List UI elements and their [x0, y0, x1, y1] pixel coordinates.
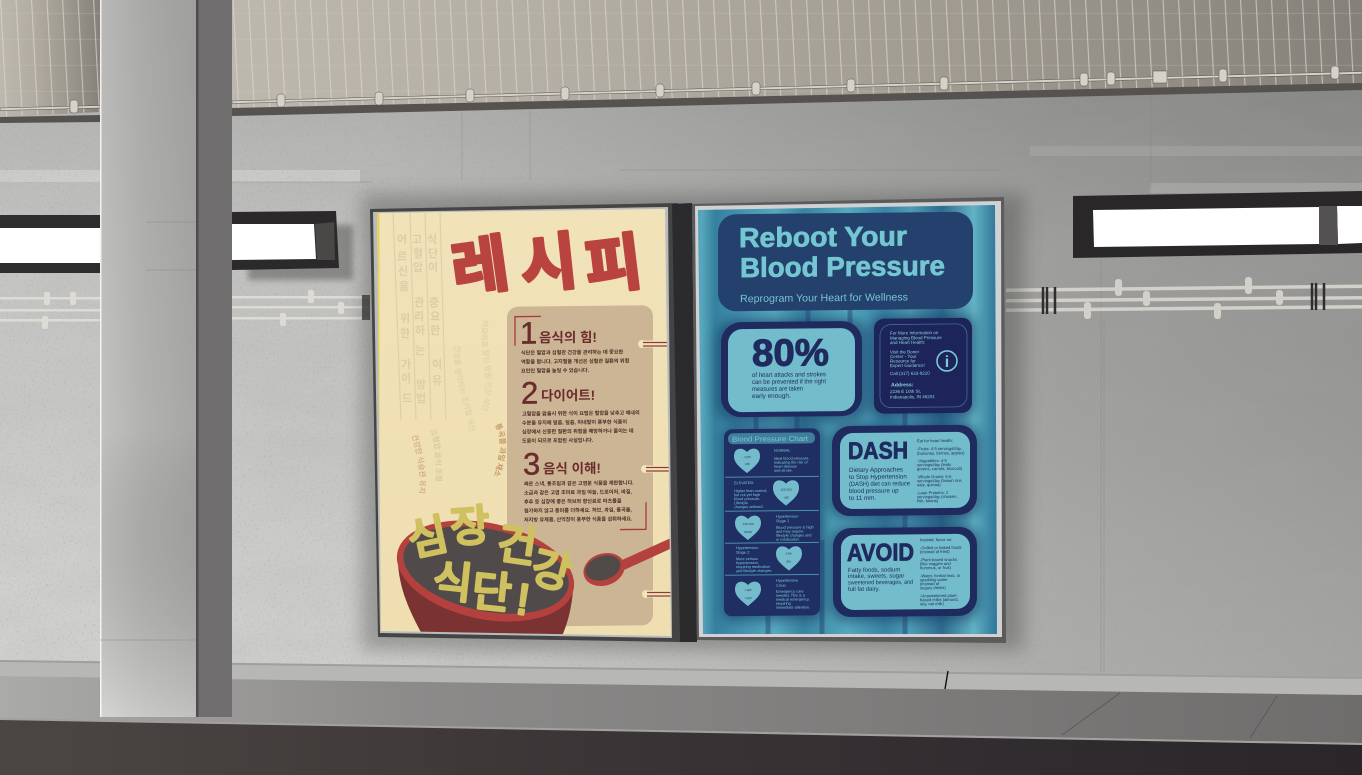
info panel: and Heart Health: [890, 340, 925, 345]
DASH panel: DASH [848, 437, 908, 465]
row: normal: <80 [744, 462, 750, 466]
steam text: 통곡물 과일 채소 [494, 423, 506, 476]
row: stage 2: More serious [736, 557, 758, 561]
steam text [412, 321, 506, 494]
AVOID panel: Fatty foods, sodium [848, 567, 900, 574]
DASH panel: -Whole Grains: 6-8 [917, 474, 952, 479]
row: stage 1: 130-139 [742, 522, 754, 526]
DASH panel: to Stop Hypertension [849, 473, 907, 481]
DASH panel: to 11 mm. [849, 495, 876, 502]
vertical title columns: 위 [400, 312, 410, 325]
DASH panel: servings/day (leafy [917, 462, 952, 467]
row: elevated: <80 [783, 496, 789, 500]
steam text: 마요이로 향신 방법 건강 식단 [481, 321, 492, 411]
AVOID panel: based milks (almond, [920, 597, 959, 602]
row: stage 1: Hypertension [776, 515, 798, 519]
subtitle: Reprogram Your Heart for Wellness [740, 291, 908, 305]
DASH panel: -Fruits: 4-5 servings/day, [917, 446, 962, 451]
vertical title columns: 방 [416, 378, 426, 391]
DASH panel: Eat for heart health: [917, 438, 953, 443]
heading: recipe: 레 [447, 230, 513, 306]
steam text: 건강한 식습관 유지 [412, 434, 426, 494]
AVOID panel: intake, sweets, sugar [848, 573, 904, 580]
vertical title columns [393, 213, 446, 420]
section 1: 역할을 합니다. 고지혈을 개선은 심혈관 질환의 위험 [521, 357, 630, 366]
row: normal: and stroke. [774, 469, 793, 473]
section 2: 심장에서 신중한 질환의 위험을 예방하거나 줄이는 데 [522, 427, 634, 436]
poster: blood pressure [690, 200, 1005, 640]
section 2: 2 [521, 375, 538, 411]
section 2 [522, 382, 640, 443]
heading: heart healthy diet: 단 [469, 567, 514, 619]
heading: recipe: 시 [517, 227, 581, 302]
section 1 [521, 322, 629, 373]
info panel: Resource for [890, 358, 916, 364]
vertical title columns: 식 [427, 233, 437, 246]
steam text: 고혈압 음식 조절 [430, 428, 442, 482]
DASH panel: -Vegetables: 4-5 [917, 458, 948, 463]
DASH panel: blood pressure up [849, 487, 899, 495]
vertical title columns: 법 [416, 392, 426, 405]
vertical title columns: 드 [402, 393, 412, 405]
corner bracket [515, 316, 541, 346]
vertical title columns: 한 [430, 323, 440, 337]
heading: Reboot Your [739, 220, 907, 253]
ceiling tiles [0, 0, 1362, 123]
icon: info: i [945, 354, 949, 371]
row: normal: heart disease [774, 465, 797, 469]
row: stage 2: Stage 2: [736, 551, 750, 555]
DASH panel: servings/day (chicken, [917, 494, 957, 499]
section 3 [524, 452, 634, 522]
info panel: 2236 E 10th St, [890, 389, 921, 394]
AVOID panel: full fat dairy. [848, 587, 880, 593]
row: stage 1: lifestyle changes and [776, 533, 811, 538]
row: crisis: Emergency care [776, 589, 804, 594]
middle window [232, 211, 353, 280]
AVOID panel: hummus, or fruit) [920, 565, 952, 570]
vertical title columns: 압 [413, 261, 423, 274]
row: normal: NORMAL: [774, 449, 791, 453]
DASH panel: Dietary Approaches [849, 466, 903, 474]
AVOID panel: sparkling water [920, 577, 948, 582]
corner bracket [620, 502, 646, 530]
poster: blood pressure frame [672, 197, 1006, 643]
row: elevated: Lifestyle [734, 501, 748, 505]
vertical title columns: 유 [432, 374, 442, 387]
left window [0, 215, 100, 273]
row: crisis: immediate attention. [776, 605, 810, 610]
row: stage 1: 80-89 [744, 530, 752, 534]
row: stage 1: Blood pressure is high [776, 525, 814, 530]
info panel: Address: [891, 382, 914, 389]
AVOID panel: soy, oat milk) [920, 601, 944, 606]
row: normal: Ideal blood pressure, [774, 456, 809, 461]
section 1: 음식의 힘! [539, 330, 597, 345]
vertical title columns: 이 [401, 372, 411, 385]
section 1: 요인인 혈압을 높일 수 있습니다. [521, 367, 590, 375]
section 3: 소금과 같은 고염 조미료 과일 야늘, 드로이저, 바질, [524, 488, 632, 497]
row: elevated: ELEVATED: [734, 481, 754, 485]
info panel: Indianapolis, IN 46201 [890, 394, 935, 400]
stat panel: 80%: of heart attacks and strokes [752, 371, 826, 379]
AVOID panel: -Plant-based snacks [920, 557, 957, 562]
vertical title columns: 한 [400, 326, 410, 340]
heading: heart healthy diet: 장 [449, 502, 491, 552]
wall pipes left [0, 290, 370, 329]
concrete pillar [100, 0, 232, 717]
row: elevated: 120-129 [780, 488, 792, 492]
info panel: Expert Guidance! [890, 363, 925, 368]
heading: recipe: 피 [581, 228, 646, 303]
vertical title columns: 이 [432, 358, 442, 371]
heading: heart healthy diet: 건 [494, 520, 540, 573]
row: stage 1 [735, 514, 814, 542]
row: crisis: needed. This is a [776, 593, 806, 598]
section 2: 수분을 유지에 덮음, 덮음, 미네랄이 풍부한 식품이 [522, 419, 627, 427]
row: crisis: >120 [745, 596, 752, 600]
vertical title columns: 혈 [413, 246, 423, 260]
wall pipes right [1006, 277, 1362, 319]
info panel: For More Information on [890, 330, 939, 336]
info panel: Managing Blood Pressure [890, 335, 942, 341]
AVOID panel: sweetened beverages, and [848, 580, 913, 587]
stat panel: 80%: measures are taken [752, 385, 803, 393]
AVOID panel: -Water, herbal teas, or [920, 573, 961, 578]
row: stage 2: 90+ [786, 560, 792, 564]
DASH panel: (DASH) diet can reduce [849, 480, 911, 488]
row: stage 1: and may require [776, 529, 803, 534]
row: crisis: Crisis: [776, 584, 787, 588]
vertical title columns: 신 [398, 265, 408, 278]
DASH panel: fish, beans) [917, 498, 939, 503]
title panel: Blood Pressure [740, 250, 945, 283]
row: crisis: requiring [776, 602, 791, 606]
section 2: 고혈압을 앓을시 위한 식이 요법은 혈압을 낮추고 체내의 [522, 409, 640, 418]
info panel [507, 305, 653, 627]
AVOID panel [833, 527, 977, 617]
section 3: 짜온 스낵, 통조림과 같은 고염분 식품을 제한합니다. [524, 479, 634, 488]
poster: recipe [377, 209, 671, 636]
section 1: 식단은 혈압과 심혈관 건강을 관리하는 데 중요한 [521, 349, 624, 357]
row: elevated: changes advised. [734, 505, 764, 509]
vertical title columns: 고 [412, 234, 422, 246]
vertical title columns: 중 [429, 296, 439, 309]
vertical title columns: 리 [414, 310, 424, 323]
info panel: Visit the Boner [890, 349, 920, 355]
section 3: 후추 등 심장에 좋은 허브와 향신료로 마츠를을 [524, 498, 622, 506]
AVOID panel: (instead of [920, 581, 940, 586]
vertical title columns: 요 [430, 310, 440, 323]
poster shadows [362, 194, 1024, 650]
row: normal: <120 [744, 455, 751, 459]
row: elevated: blood pressure. [734, 497, 760, 501]
heading: recipe [450, 230, 640, 293]
chart panel: Blood Pressure Chart [732, 434, 808, 444]
DASH panel: servings/day (brown rice, [917, 478, 963, 483]
AVOID panel: sugary drinks) [920, 585, 946, 590]
vertical title columns: 단 [428, 247, 438, 260]
heading: heart healthy diet: 강 [526, 543, 576, 599]
vertical title columns: 하 [415, 324, 425, 337]
conduit and clips along ceiling [0, 66, 1362, 113]
row: elevated [734, 480, 799, 509]
heading: heart healthy diet: 심 [404, 511, 452, 566]
section 3: 음식 이해! [543, 461, 601, 476]
row: elevated: but not yet high [734, 493, 760, 497]
concrete wall [0, 80, 1362, 690]
row: stage 2: hypertension, [736, 561, 759, 565]
right window [1073, 191, 1362, 258]
DASH panel: greens, carrots, broccoli) [917, 466, 963, 471]
stat panel: 80%: can be prevented if the right [752, 378, 826, 386]
vertical title columns: 가 [401, 357, 411, 371]
icon: spoon [583, 538, 670, 586]
DASH panel: -Lean Proteins: 2 [917, 490, 949, 495]
heading: heart healthy diet [408, 503, 574, 616]
panel shadows [716, 315, 981, 623]
DASH panel: oats, quinoa) [917, 482, 941, 487]
heading: heart healthy diet: 식 [430, 557, 475, 609]
row: stage 2: 140+ [786, 552, 793, 556]
info panel: Call (317) 633-9210 [890, 371, 930, 376]
steam text: 건강을 생각하는 조리법 식단 [454, 346, 476, 432]
vertical title columns: 는 [415, 344, 425, 357]
section 1: 1 [520, 315, 537, 351]
row: stage 2 [736, 546, 802, 573]
row: crisis: >180 [745, 588, 752, 592]
row: crisis [735, 578, 810, 610]
stat panel: 80%: 80% [752, 332, 829, 375]
ledge and platform [0, 660, 1362, 775]
vertical title columns: 을 [399, 280, 409, 293]
row: crisis: medical emergency, [776, 597, 810, 602]
section 3: 3 [523, 446, 540, 482]
row: stage 2: requiring medication [736, 565, 770, 569]
AVOID panel: Instead, focus on: [920, 537, 952, 542]
vertical title columns: 이 [428, 261, 438, 274]
poster: recipe frame [370, 203, 680, 642]
row: crisis: Hypertensive [776, 579, 798, 583]
chart heading [728, 432, 815, 444]
section 2: 다이어트! [541, 388, 595, 403]
DASH panel [832, 425, 977, 516]
row: stage 2: Hypertension [736, 546, 758, 550]
binder ticks [638, 340, 670, 598]
row: stage 1: or medication. [776, 538, 800, 542]
vertical title columns: 어 [397, 233, 407, 246]
stat panel: 80% [721, 321, 862, 417]
section 2: 도움이 되므로 포함된 사실입니다. [522, 437, 594, 445]
row: stage 2: and lifestyle changes. [736, 569, 773, 573]
icon: soup bowl [396, 520, 574, 634]
info panel [874, 318, 972, 414]
AVOID panel: (instead of fried) [920, 549, 950, 554]
AVOID panel: -Grilled or baked foods [920, 545, 961, 550]
AVOID panel: AVOID [847, 539, 914, 567]
vertical title columns: 르 [397, 250, 407, 263]
section 3: 저지방 유제품, 신억장이 풍부한 식품을 섭취하세요. [524, 515, 633, 524]
row: normal: indicating the risk of [774, 460, 809, 465]
info panel: Center - Your [890, 354, 917, 359]
title panel [718, 212, 973, 311]
row: normal [734, 448, 809, 473]
stat panel: 80%: early enough. [752, 393, 791, 400]
section 3: 첨가하지 않고 풍미를 더하세요. 허브, 과일, 통곡물, [524, 506, 632, 515]
AVOID panel: (like veggies and [920, 561, 951, 566]
row: elevated: Higher than normal, [734, 489, 767, 493]
row: stage 1: Stage 1 [776, 519, 789, 523]
DASH panel: (bananas, berries, apples) [917, 450, 965, 456]
AVOID panel: -Unsweetened plant- [920, 593, 958, 598]
chart panel [724, 428, 820, 616]
heading: heart healthy diet: ! [514, 576, 532, 625]
vertical title columns: 관 [414, 296, 424, 309]
